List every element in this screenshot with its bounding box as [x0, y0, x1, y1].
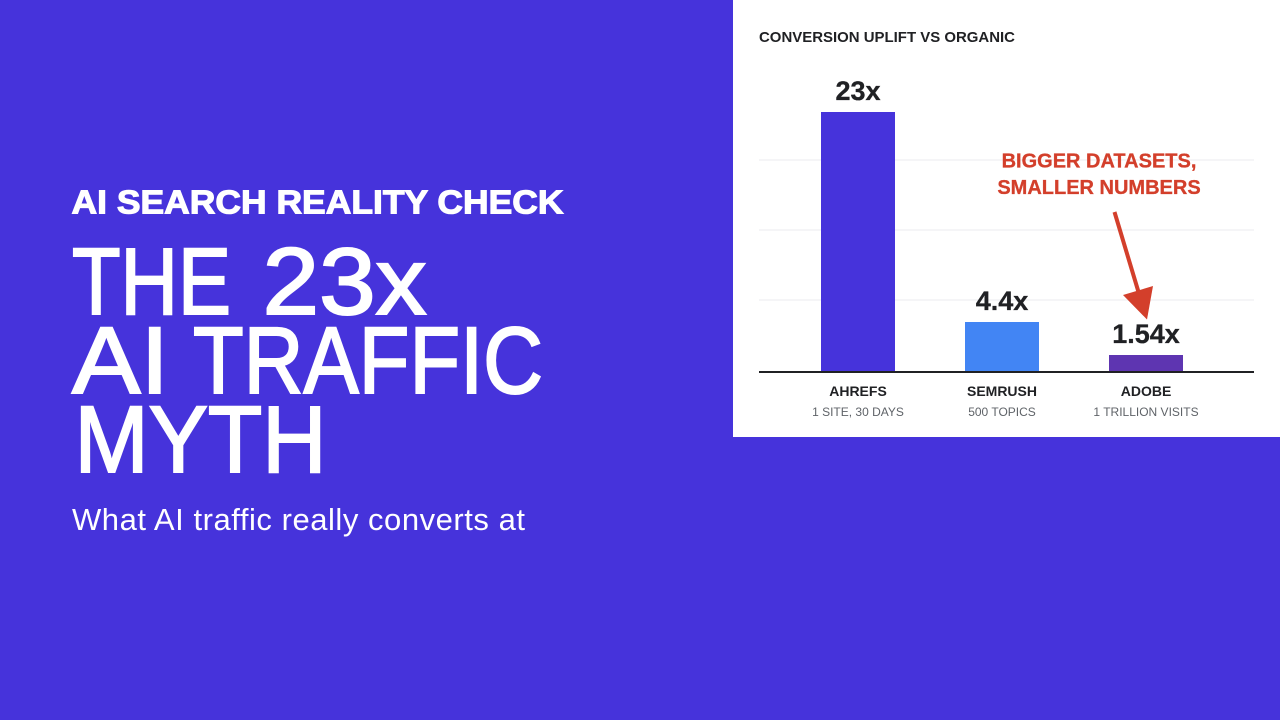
main title: TRAFFIC — [193, 308, 543, 414]
subtitle: What AI traffic really converts at — [72, 502, 525, 537]
bar chart — [759, 30, 1254, 419]
eyebrow heading: AI SEARCH REALITY CHECK — [72, 184, 564, 220]
main title: AI — [72, 308, 169, 414]
panel: title block — [70, 184, 564, 537]
bar: Semrush: 4.4x — [976, 286, 1028, 316]
bar: Semrush — [965, 286, 1039, 419]
bar: Ahrefs — [812, 76, 904, 419]
bar: Ahrefs: 1 SITE, 30 DAYS — [812, 405, 904, 419]
bar: Adobe: ADOBE — [1121, 383, 1171, 399]
bar: Adobe: 1.54x — [1112, 319, 1180, 349]
callout: SMALLER NUMBERS — [997, 177, 1201, 199]
bar: Adobe — [1093, 319, 1199, 419]
main title — [72, 229, 543, 493]
callout — [997, 150, 1201, 199]
main title: THE — [72, 229, 231, 335]
bar: Adobe: 1 TRILLION VISITS — [1093, 405, 1199, 419]
bar: Ahrefs: 23x — [835, 76, 881, 106]
panel: chart — [733, 0, 1280, 437]
main title: MYTH — [74, 387, 326, 493]
chart heading: CONVERSION UPLIFT VS ORGANIC — [759, 30, 1015, 46]
bar: Ahrefs: AHREFS — [829, 383, 887, 399]
bar: Semrush: 500 TOPICS — [968, 405, 1036, 419]
callout: BIGGER DATASETS, — [1002, 150, 1196, 172]
bar: Semrush: SEMRUSH — [967, 383, 1037, 399]
main title: 23x — [262, 229, 426, 335]
arrow — [1114, 212, 1153, 320]
